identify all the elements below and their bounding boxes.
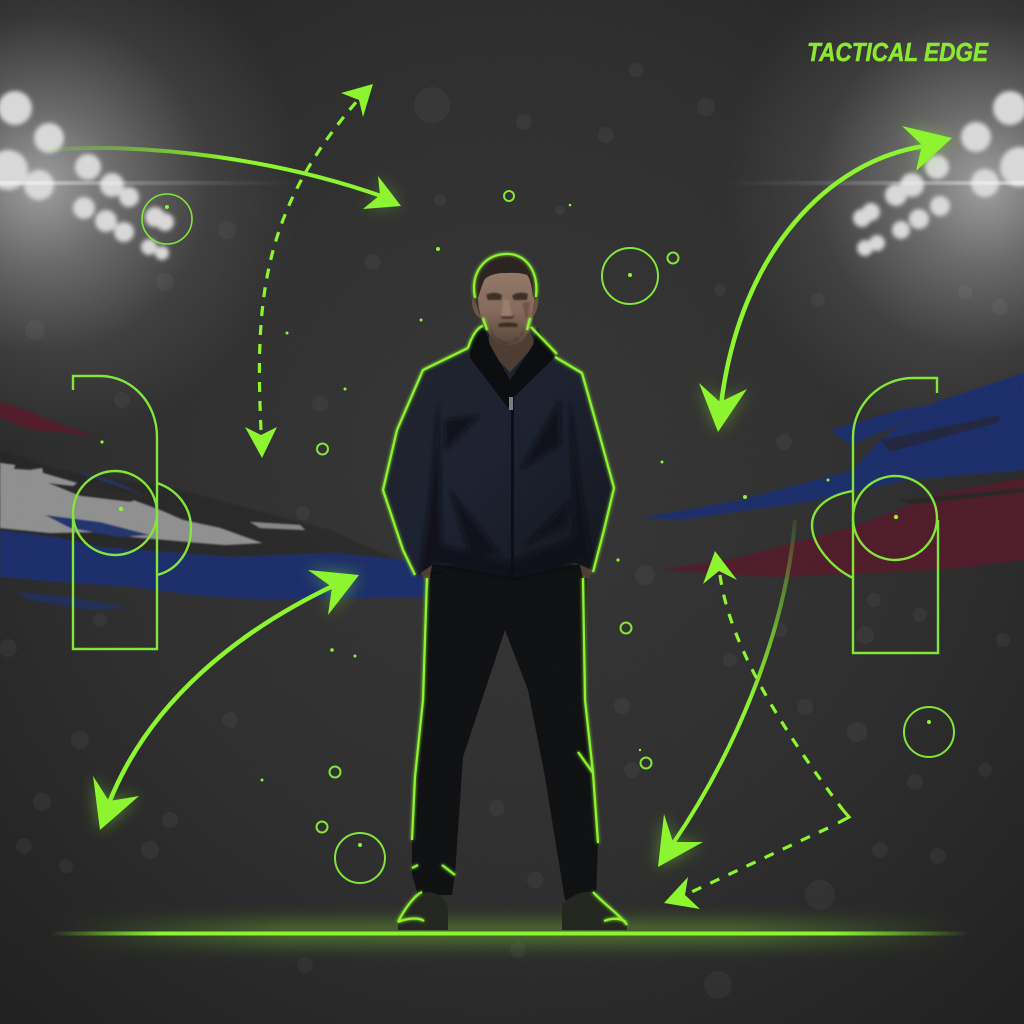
player position circles: [142, 191, 954, 883]
zipper pull: [509, 397, 513, 410]
neck and collar: [470, 325, 555, 408]
zipper: [511, 397, 514, 575]
floodlight right: [720, 0, 1024, 445]
green rim light: [383, 254, 627, 925]
dashed arrow: bottom right: [664, 551, 849, 909]
double arrow: top right: [699, 126, 952, 432]
jacket shadow folds: [420, 395, 592, 578]
floodlight left: [0, 0, 300, 445]
trousers: [412, 565, 598, 900]
brush stroke: left flag colours: [0, 402, 425, 610]
tactical board right: [812, 378, 938, 653]
brush stroke: right flag colours: [640, 373, 1024, 577]
jacket: [383, 330, 614, 577]
tactical board left: [73, 376, 191, 649]
head: [472, 254, 538, 345]
solid arrow: top left: [50, 148, 401, 209]
green sparks: [100, 204, 829, 781]
shoes: [398, 892, 627, 930]
ground line: [50, 920, 970, 946]
solid arrow: bottom right: [658, 520, 795, 867]
double arrow: bottom left: [93, 570, 359, 830]
hands in pockets: [421, 565, 592, 588]
title: TACTICAL EDGE: [807, 37, 989, 67]
coach figure: [383, 254, 627, 930]
dashed arrow: top centre-left: [245, 84, 373, 458]
